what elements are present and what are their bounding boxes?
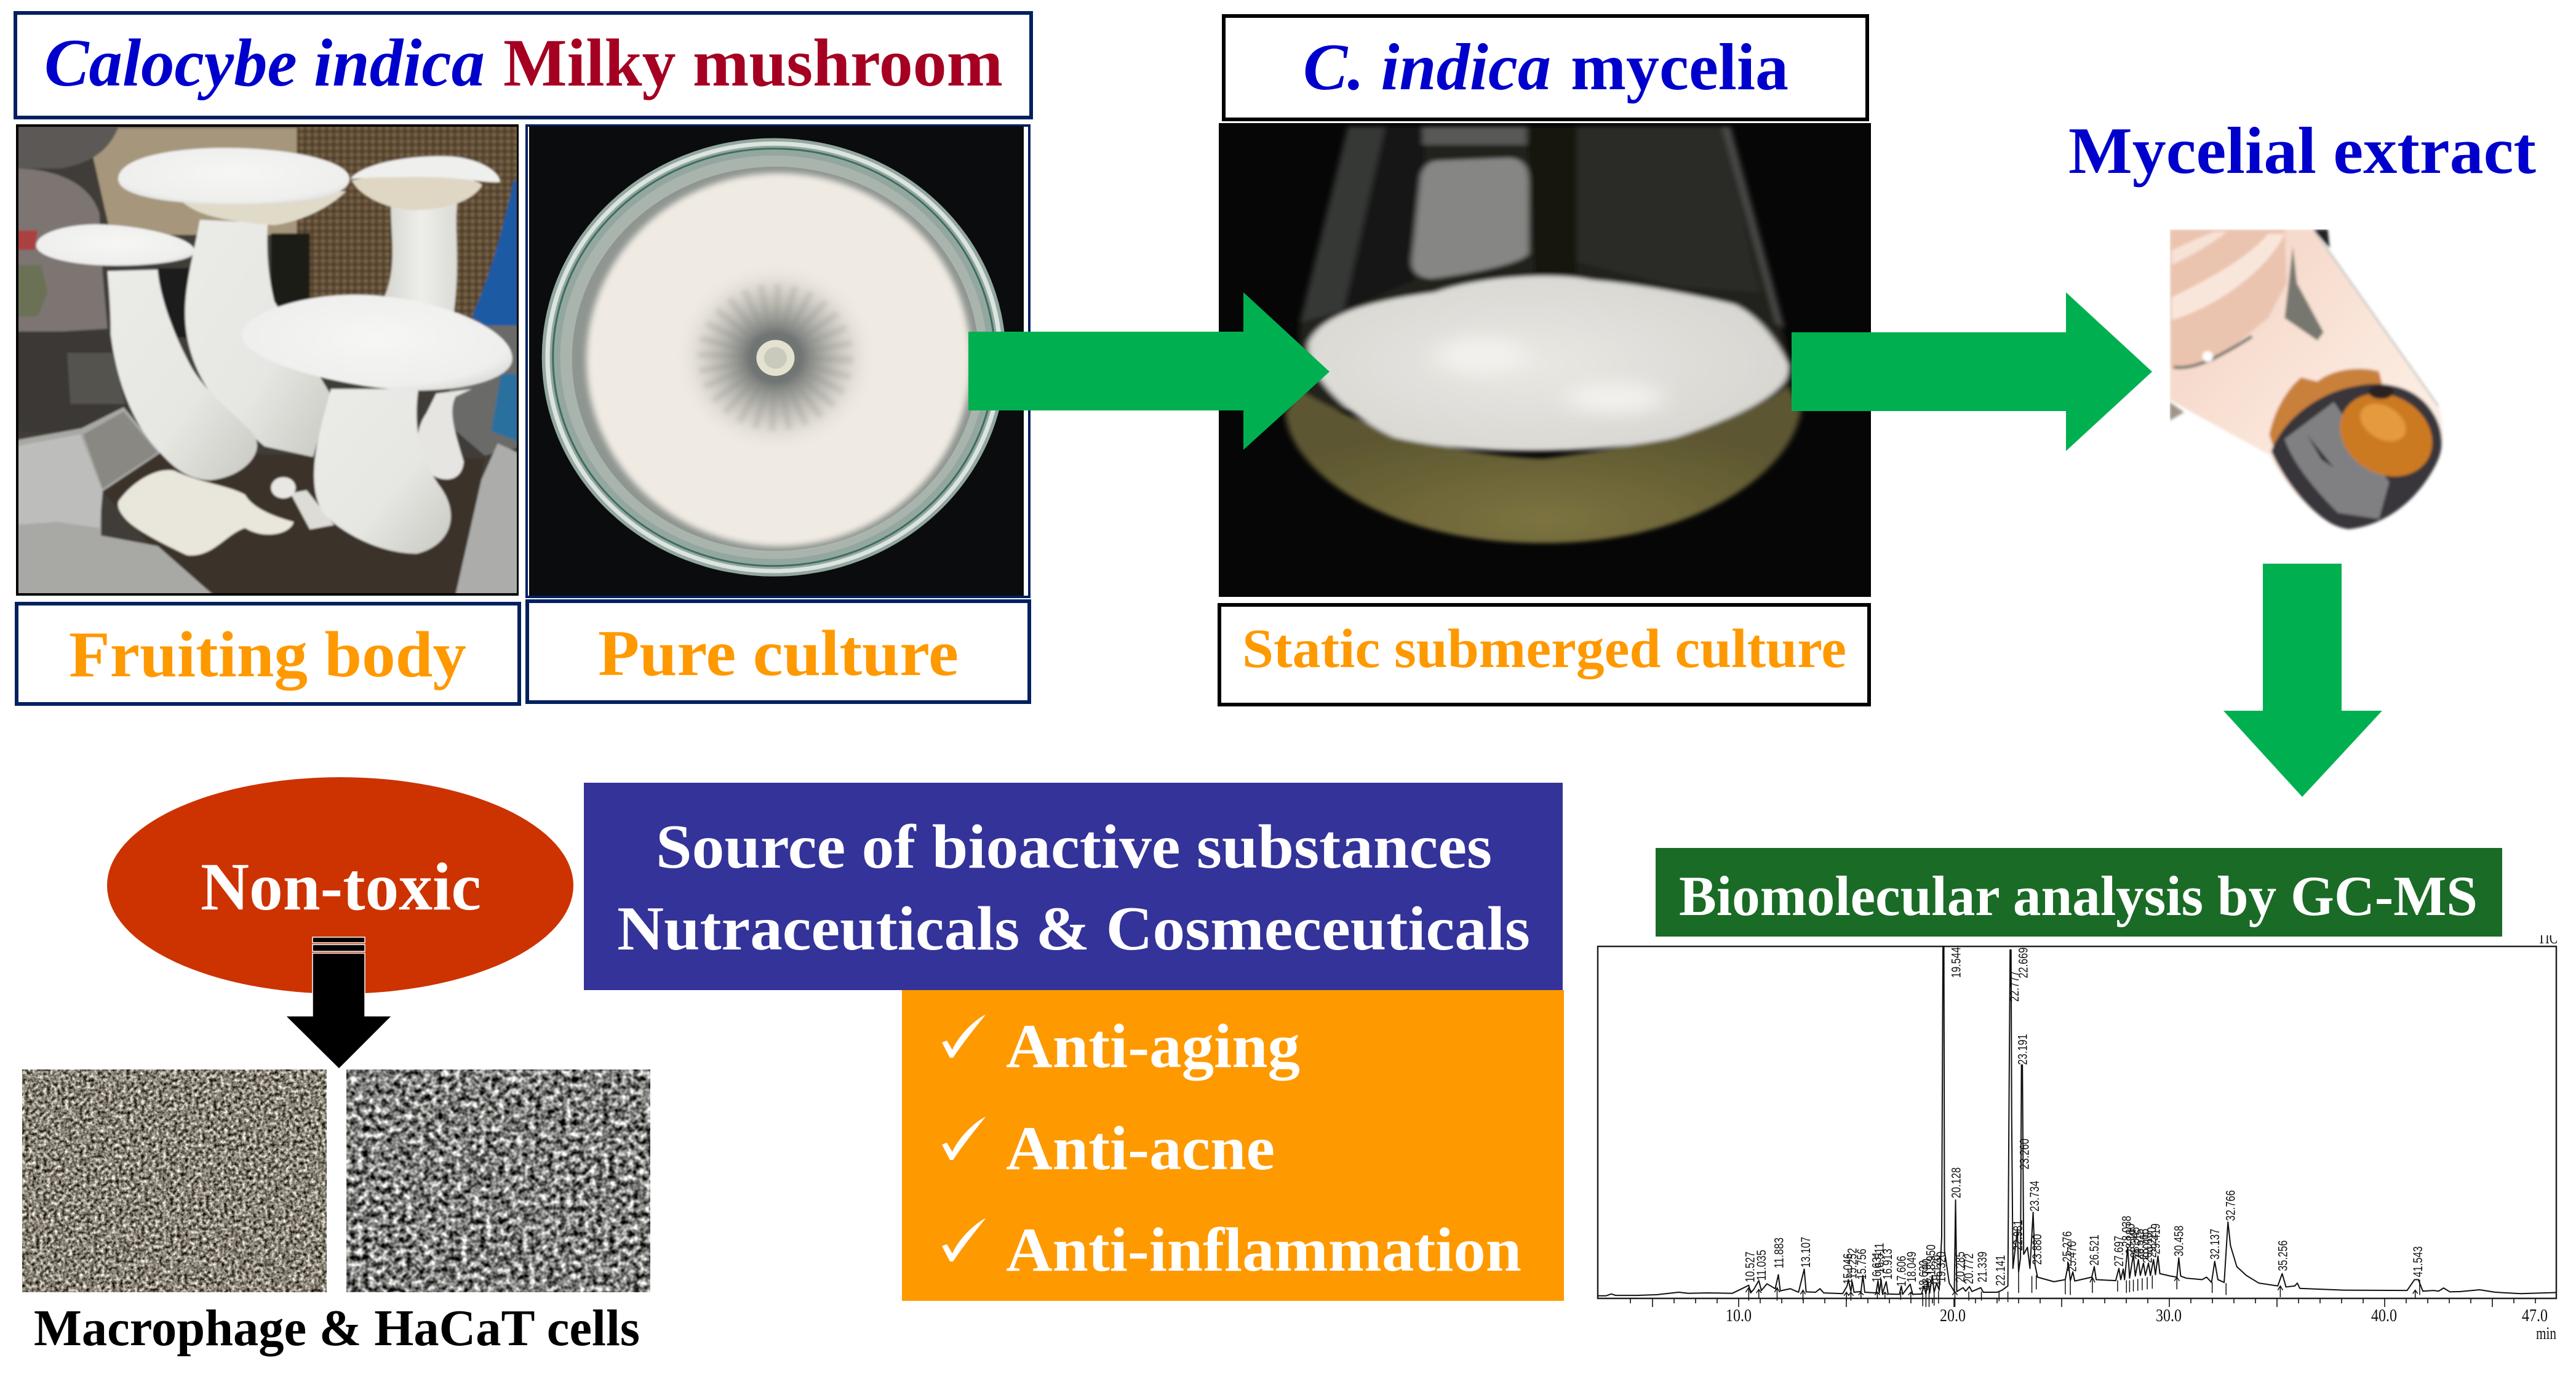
retention time labels: 25.276 bbox=[2059, 1231, 2075, 1262]
heading box: C. indica mycelia: mycelia bbox=[1571, 31, 1788, 104]
retention time labels: 23.260 bbox=[2017, 1138, 2032, 1169]
time axis labels: 20.0 bbox=[1940, 1306, 1966, 1325]
retention time labels: 16.631 bbox=[1869, 1252, 1884, 1282]
retention time labels: 16.511 bbox=[1872, 1243, 1887, 1274]
mycelium culture bbox=[586, 173, 971, 546]
item: Anti-acne: Anti-acne bbox=[1006, 1114, 1275, 1183]
photo: fruiting body mushrooms bbox=[15, 123, 524, 598]
retention time labels bbox=[1742, 947, 2425, 1291]
retention time labels: 15.756 bbox=[1854, 1249, 1869, 1279]
arrow: Non-toxic to cell photos bbox=[285, 937, 392, 1069]
front mushroom bbox=[242, 295, 512, 554]
retention time labels: 32.137 bbox=[2207, 1229, 2222, 1260]
time axis labels: 47.0 bbox=[2522, 1306, 2548, 1325]
retention time labels: 19.120 bbox=[1928, 1255, 1944, 1286]
retention time labels: 30.458 bbox=[2171, 1226, 2186, 1257]
panel: bioactivities list bbox=[902, 990, 1564, 1301]
photo: macrophage cells bbox=[22, 1069, 327, 1292]
caption: Static submerged culture: Static submerged culture bbox=[1242, 618, 1846, 679]
arrow: pure culture to mycelia bbox=[968, 292, 1330, 450]
time axis labels: min bbox=[2536, 1324, 2556, 1343]
time axis labels: 40.0 bbox=[2371, 1306, 2397, 1325]
photo: test tube with extract bbox=[2169, 229, 2444, 532]
retention time labels: 28.038 bbox=[2119, 1216, 2134, 1247]
small mushrooms bbox=[271, 389, 472, 529]
retention time labels: 23.880 bbox=[2029, 1234, 2044, 1265]
oval: Non-toxic: Non-toxic bbox=[201, 849, 481, 924]
retention time labels: 29.010 bbox=[2140, 1233, 2155, 1263]
back right mushroom bbox=[350, 156, 500, 312]
title: Calocybe indica Milky mushroom: Calocybe indica bbox=[44, 25, 485, 100]
time axis labels: 30.0 bbox=[2156, 1306, 2182, 1325]
retention time labels: 15.252 bbox=[1844, 1248, 1860, 1279]
retention time labels: 23.734 bbox=[2027, 1180, 2042, 1212]
retention time labels: 18.630 bbox=[1916, 1260, 1931, 1291]
retention time labels: 28.180 bbox=[2123, 1223, 2138, 1254]
retention time labels: 17.606 bbox=[1894, 1256, 1909, 1287]
time axis labels bbox=[1726, 1306, 2556, 1343]
retention time labels: 41.543 bbox=[2410, 1246, 2425, 1277]
retention time labels: 22.141 bbox=[1993, 1255, 2008, 1286]
photo: HaCaT cells bbox=[346, 1069, 650, 1292]
icon: check mark bbox=[942, 1117, 986, 1160]
photo: pure culture petri dish bbox=[527, 126, 1029, 597]
retention time labels: 21.339 bbox=[1974, 1252, 1990, 1282]
item: Anti-aging: Anti-aging bbox=[1006, 1012, 1300, 1081]
retention time labels: 29.419 bbox=[2148, 1223, 2163, 1254]
retention time labels: 23.191 bbox=[2015, 1034, 2030, 1065]
retention time labels: 20.128 bbox=[1948, 1167, 1964, 1198]
heading box: Biomolecular analysis by GC-MS bbox=[1656, 848, 2502, 937]
retention time labels: 28.515 bbox=[2131, 1229, 2147, 1260]
heading box: C. indica mycelia: C. indica bbox=[1303, 31, 1551, 104]
title: Calocybe indica Milky mushroom bbox=[15, 13, 1031, 118]
time axis labels: 10.0 bbox=[1726, 1306, 1752, 1325]
retention time labels: 32.766 bbox=[2223, 1190, 2238, 1221]
retention time labels: 28.765 bbox=[2136, 1229, 2151, 1260]
retention time labels: 13.107 bbox=[1798, 1237, 1813, 1268]
left mushroom bbox=[36, 225, 257, 480]
retention time labels: 18.950 bbox=[1923, 1244, 1939, 1276]
centre back mushroom bbox=[118, 148, 349, 457]
heading: Mycelial extract: Mycelial extract bbox=[2068, 114, 2536, 188]
arrow: extract to GC-MS bbox=[2223, 564, 2382, 797]
retention time labels: 18.790 bbox=[1919, 1258, 1934, 1289]
time axis ticks bbox=[1630, 1298, 2535, 1307]
caption: Fruiting body: Fruiting body bbox=[69, 618, 466, 690]
retention time labels: 35.256 bbox=[2275, 1241, 2291, 1271]
panel: source of bioactive substances bbox=[584, 783, 1563, 990]
panel: source of bioactive substances: Source of bioactive substances bbox=[656, 812, 1492, 882]
retention time labels: 19.320 bbox=[1933, 1252, 1948, 1282]
retention time labels: 22.981 bbox=[2010, 1220, 2025, 1251]
icon: check mark bbox=[942, 1015, 986, 1058]
caption: Fruiting body bbox=[17, 604, 519, 704]
item: Anti-inflammation: Anti-inflammation bbox=[1006, 1215, 1521, 1285]
retention time labels: 27.697 bbox=[2111, 1236, 2126, 1266]
dish rim bbox=[542, 138, 1006, 577]
chart: GC-MS chromatogram bbox=[1597, 927, 2558, 1343]
chromatogram trace bbox=[1597, 946, 2556, 1296]
retention time labels: 26.521 bbox=[2086, 1234, 2102, 1266]
oval: Non-toxic bbox=[107, 777, 573, 994]
title: Calocybe indica Milky mushroom: Milky mushroom bbox=[503, 25, 1003, 100]
icon: check mark bbox=[942, 1218, 986, 1261]
retention time labels: 25.470 bbox=[2064, 1241, 2079, 1272]
peak integration arrows bbox=[1745, 1272, 2420, 1307]
caption: Macrophage & HaCaT cells: Macrophage & HaCaT cells bbox=[34, 1300, 640, 1357]
photo: flask with static submerged culture bbox=[1219, 123, 1871, 597]
arrow: mycelia to extract bbox=[1792, 292, 2152, 451]
retention time labels: 22.777 bbox=[2006, 971, 2022, 1002]
retention time labels: 18.049 bbox=[1904, 1252, 1919, 1282]
heading box: Biomolecular analysis by GC-MS: Biomolecular analysis by GC-MS bbox=[1679, 865, 2478, 927]
retention time labels: 22.669 bbox=[2016, 948, 2030, 978]
retention time labels: 10.527 bbox=[1742, 1252, 1758, 1282]
retention time labels: 20.285 bbox=[1952, 1252, 1968, 1282]
retention time labels: 28.345 bbox=[2127, 1227, 2142, 1258]
retention time labels: 11.883 bbox=[1771, 1237, 1787, 1268]
retention time labels: 16.913 bbox=[1880, 1249, 1895, 1279]
caption: Static submerged culture bbox=[1219, 605, 1869, 705]
heading box: C. indica mycelia bbox=[1224, 16, 1867, 119]
caption: Pure culture: Pure culture bbox=[598, 617, 959, 689]
caption: Pure culture bbox=[527, 601, 1029, 702]
retention time labels: 19.544 bbox=[1948, 947, 1964, 978]
retention time labels: 15.046 bbox=[1840, 1253, 1855, 1284]
retention time labels: 11.035 bbox=[1753, 1250, 1769, 1281]
retention time labels: 20.772 bbox=[1961, 1253, 1976, 1284]
panel: source of bioactive substances: Nutraceuticals & Cosmeceuticals bbox=[617, 894, 1530, 964]
radial centre bbox=[674, 262, 877, 454]
retention time labels: 29.220 bbox=[2144, 1227, 2159, 1258]
